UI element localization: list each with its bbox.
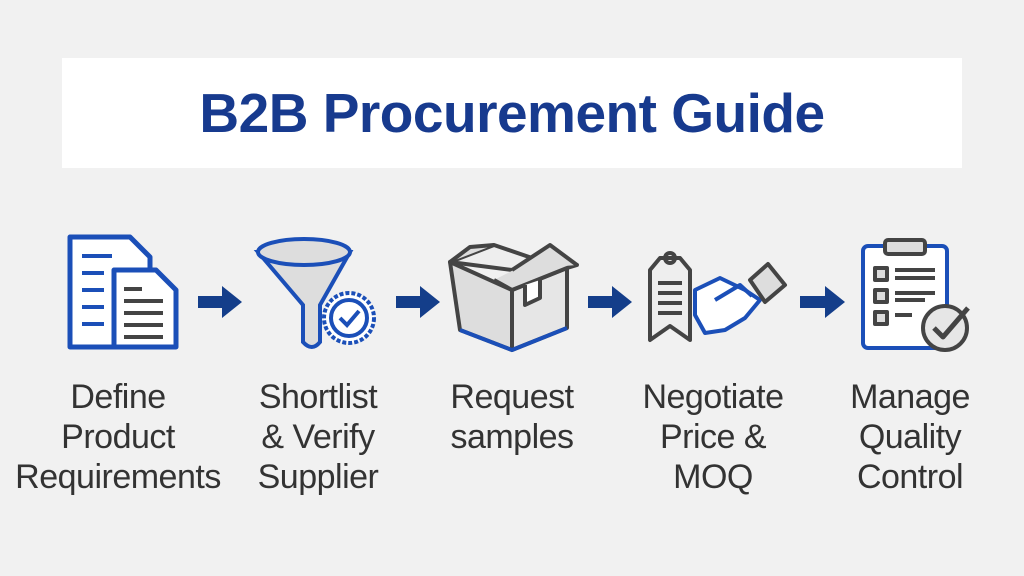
label: step 1: Requirements xyxy=(15,458,221,496)
label: step 4: MOQ xyxy=(673,458,753,496)
icon: documents xyxy=(70,237,176,347)
label: step 1: Product xyxy=(61,418,175,456)
label: step 5 xyxy=(850,378,970,496)
icon: clipboard xyxy=(863,240,968,350)
label: step 1 xyxy=(15,378,221,496)
label: step 5: Quality xyxy=(859,418,961,456)
title: B2B Procurement Guide xyxy=(199,82,825,144)
label: step 3: samples xyxy=(450,418,574,456)
label: step 4: Negotiate xyxy=(642,378,784,416)
arrow 3 xyxy=(588,286,632,318)
icon: tag handshake xyxy=(650,253,785,340)
arrow 4 xyxy=(800,286,845,318)
label: step 2: & Verify xyxy=(261,418,375,456)
title box xyxy=(62,58,962,168)
icon: box xyxy=(450,245,577,350)
label: step 1: Define xyxy=(70,378,166,416)
arrow 1 xyxy=(198,286,242,318)
label: step 3 xyxy=(450,378,574,456)
label: step 2 xyxy=(258,378,378,496)
label: step 2: Shortlist xyxy=(259,378,377,416)
icon: funnel with badge xyxy=(258,239,374,347)
label: step 4: Price & xyxy=(660,418,766,456)
label: step 2: Supplier xyxy=(258,458,378,496)
label: step 5: Control xyxy=(857,458,963,496)
label: step 3: Request xyxy=(450,378,574,416)
label: step 4 xyxy=(642,378,784,496)
arrow 2 xyxy=(396,286,440,318)
label: step 5: Manage xyxy=(850,378,970,416)
